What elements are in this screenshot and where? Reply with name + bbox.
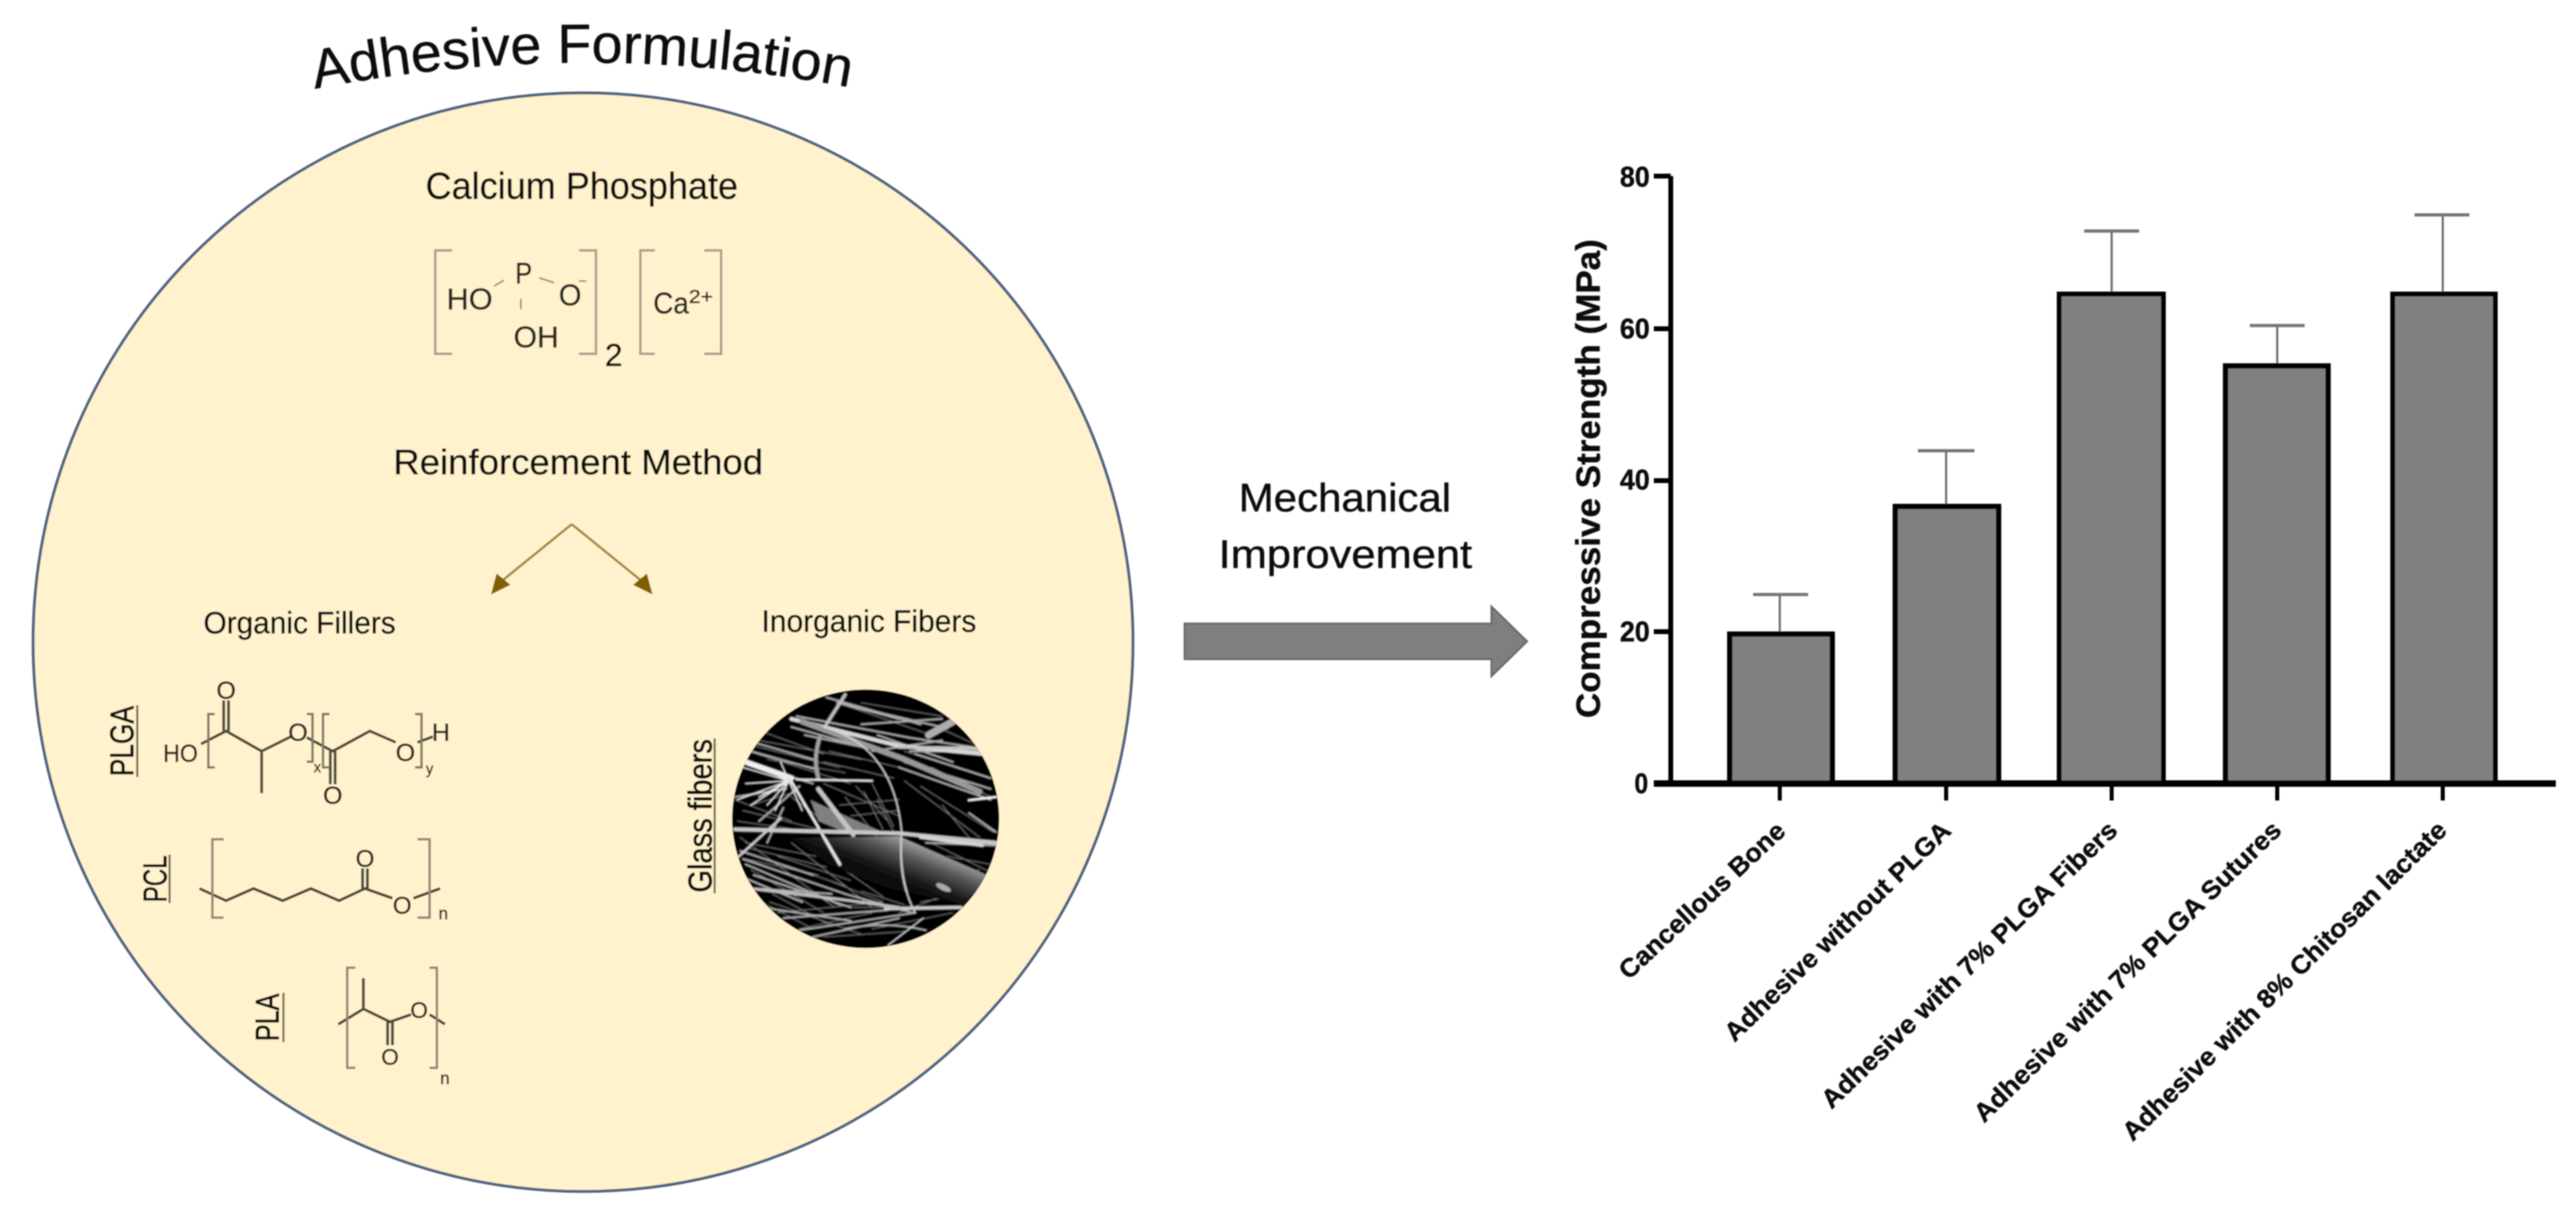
chemical structure: PLA: O — [381, 1044, 399, 1069]
label: Mechanical Improvement: Mechanical — [1239, 477, 1451, 520]
y axis tick labels: 20 — [1620, 616, 1650, 648]
x axis category labels: Adhesive without PLGA — [1718, 816, 1957, 1047]
label: PCL: PCL — [136, 855, 174, 902]
image: glass fibers micrograph — [727, 684, 1007, 953]
chemical structure: calcium phosphate: 2 — [605, 338, 623, 373]
chemical structure: PLGA: x — [313, 759, 321, 775]
chemical structure: PLA — [338, 968, 450, 1088]
chemical structure: PCL: O — [355, 846, 375, 872]
bar: Adhesive with 8% Chitosan lactate — [2393, 294, 2495, 784]
heading: Calcium Phosphate: Calcium Phosphate — [426, 165, 738, 207]
x axis category labels: Adhesive with 7% PLGA Fibers — [1815, 815, 2123, 1114]
label: Glass fibers: Glass fibers — [682, 739, 719, 893]
chemical structure: calcium phosphate: P — [515, 257, 532, 290]
y axis tick labels: 80 — [1620, 162, 1650, 193]
y axis tick labels: 60 — [1620, 313, 1650, 345]
subheading: Organic Fillers: Organic Fillers — [203, 607, 396, 641]
x axis category labels: Adhesive with 8% Chitosan lactate — [2117, 815, 2452, 1146]
chemical structure: PLGA: y — [426, 761, 433, 777]
chemical structure: calcium phosphate: 2+ — [689, 286, 713, 307]
panel: adhesive formulation circle — [33, 93, 1133, 1191]
title: Adhesive Formulation — [313, 23, 851, 124]
heading: Reinforcement Method: Reinforcement Method — [393, 443, 763, 482]
y axis title: Compressive Strength (MPa) — [1569, 239, 1607, 718]
y axis tick labels: 0 — [1634, 768, 1648, 800]
arrow: to chart — [1185, 607, 1527, 676]
chemical structure: PCL: O — [392, 893, 412, 919]
chemical structure: PLA: O — [410, 998, 428, 1023]
x axis category labels: Adhesive with 7% PLGA Sutures — [1968, 815, 2287, 1128]
bar: Cancellous Bone — [1730, 634, 1832, 784]
chemical structure: PLA: n — [440, 1069, 450, 1088]
bar chart: compressive strength — [1569, 162, 2556, 1146]
chemical structure: PCL — [199, 839, 448, 923]
label: Mechanical Improvement: Improvement — [1219, 533, 1472, 577]
y axis tick labels: 40 — [1620, 464, 1650, 496]
bar: Adhesive without PLGA — [1895, 506, 1999, 784]
x axis category labels: Cancellous Bone — [1613, 816, 1791, 985]
arrows: reinforcement branches — [491, 524, 652, 595]
y axis tick labels — [1620, 162, 1650, 800]
chemical structure: calcium phosphate: HO — [447, 283, 493, 316]
label: Mechanical Improvement — [1219, 477, 1472, 577]
axes — [1654, 176, 2556, 800]
chemical structure: PLGA: O — [288, 718, 308, 746]
error bars — [1753, 215, 2469, 632]
chemical structure: PCL: n — [438, 905, 448, 923]
bar: Adhesive with 7% PLGA Sutures — [2226, 366, 2328, 784]
subheading: Inorganic Fibers: Inorganic Fibers — [761, 605, 976, 639]
chemical structure: calcium phosphate: OH — [514, 321, 559, 354]
label: PLGA: PLGA — [103, 705, 141, 776]
chemical structure: PLGA: H — [432, 718, 450, 746]
chemical structure: calcium phosphate — [435, 250, 721, 373]
chemical structure: PLGA — [163, 676, 450, 809]
chemical structure: PLGA: O — [396, 738, 415, 767]
chemical structure: PLGA: O — [216, 676, 236, 704]
bar: Adhesive with 7% PLGA Fibers — [2059, 294, 2163, 784]
chemical structure: PLGA: HO — [163, 739, 198, 767]
chemical structure: PLGA: O — [323, 781, 342, 809]
label: PLA: PLA — [249, 994, 286, 1041]
title: Adhesive Formulation: Adhesive Formulation — [313, 23, 851, 90]
x axis category labels — [1613, 815, 2452, 1146]
chemical structure: calcium phosphate: O — [559, 279, 581, 312]
chemical structure: calcium phosphate: Ca — [653, 287, 689, 320]
